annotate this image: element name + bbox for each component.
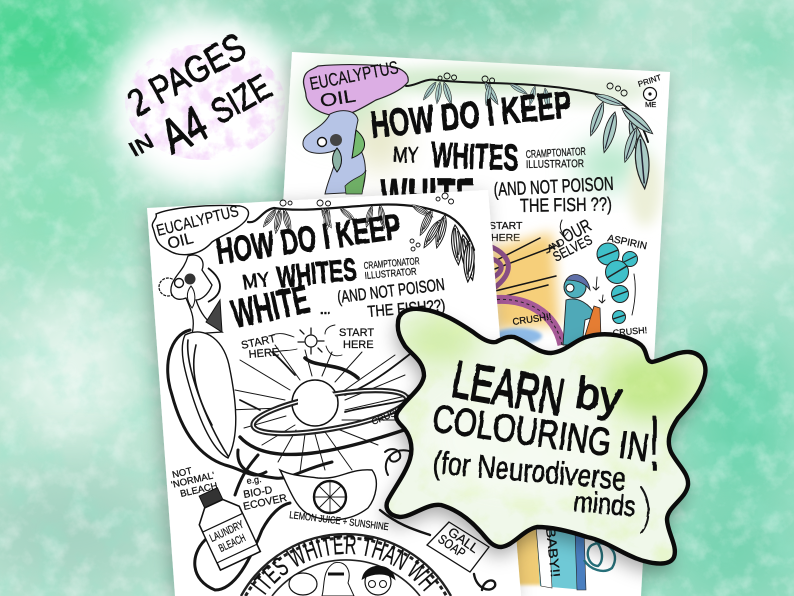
front brand note: e.g. (246, 474, 262, 486)
back author credit: ILLUSTRATOR (526, 158, 584, 171)
shell (289, 573, 317, 595)
back eucalyptus branch (406, 73, 656, 189)
front bottle: laundry bleach: LAUNDRY (208, 519, 246, 545)
front start-here notes with small sun: START (339, 327, 374, 339)
front crush label and curl: CRUSH!! (370, 404, 408, 427)
front start-here notes with small sun: HERE (343, 339, 374, 351)
front koala on trunk (159, 255, 222, 334)
back aspirin pills: ASPIRIN (606, 233, 648, 252)
front brand note (242, 474, 288, 513)
front tube looping to lemon (195, 450, 332, 590)
callout headline: minds (572, 486, 637, 523)
front author credit: CRAMPTONATOR (363, 256, 420, 272)
back title: MY (393, 142, 420, 167)
back and-ourselves note (542, 215, 595, 265)
back start-here note: HERE (491, 232, 520, 244)
callout headline: ! (649, 400, 660, 488)
white cloud with pink splatter behind size note (110, 17, 300, 193)
callout headline: LEARN (448, 351, 568, 427)
callout headline (430, 351, 660, 533)
front not-normal-bleach note (170, 466, 219, 500)
front start-here notes with small sun (240, 325, 374, 361)
front gall soap tag: SOAP (435, 531, 468, 561)
person in hood with sunglasses (322, 562, 354, 596)
back author credit (526, 146, 586, 171)
front title: WHITES (275, 252, 358, 295)
front brand note: BIO-D (242, 484, 274, 501)
back koala (303, 111, 366, 194)
callout headline: by (573, 368, 625, 423)
front start-here notes with small sun: START (240, 333, 277, 352)
front title: HOW DO I KEEP (213, 205, 403, 272)
back and-ourselves note: OUR (559, 215, 595, 247)
back label: Eucalyptus Oil: OIL (318, 86, 357, 111)
back author credit: CRAMPTONATOR (526, 146, 586, 161)
front author credit (363, 256, 420, 282)
front not-normal-bleach note: 'NORMAL' (170, 470, 216, 491)
back start-here note (489, 220, 523, 244)
back figure with pestle (563, 275, 601, 345)
front title: ... (320, 302, 331, 317)
back subtitle: THE FISH ??) (520, 194, 612, 217)
back aspirin pills (593, 233, 648, 338)
front label: Eucalyptus Oil (152, 203, 248, 255)
back and-ourselves note: SELVES (550, 231, 595, 265)
note: 2 pages in A4 size: 2 PAGES (121, 26, 253, 125)
note: 2 pages in A4 size: A4 (152, 95, 216, 165)
back label: Eucalyptus Oil (303, 57, 408, 116)
front title: WHITE (228, 278, 313, 337)
front bottle: laundry bleach (188, 483, 260, 570)
back print-me stamp: PRINT (637, 73, 663, 89)
front label: Eucalyptus Oil: EUCALYPTUS (155, 203, 240, 240)
front long leaf on left (168, 330, 266, 475)
note: 2 pages in A4 size (121, 26, 278, 165)
front not-normal-bleach note: BLEACH (179, 481, 219, 500)
front big sun with rays (228, 345, 420, 472)
callout: wavy lime blob (380, 300, 710, 570)
back sheet colour washes (300, 62, 661, 226)
back print-me stamp: ME (645, 100, 656, 109)
back print-me stamp (637, 73, 663, 109)
front not-normal-bleach note: NOT (171, 466, 193, 481)
front title (213, 205, 403, 337)
front subtitle: THE FISH??) (367, 297, 446, 321)
back aspirin pills: CRUSH! (612, 325, 648, 338)
back lower coloured band with baby text (510, 525, 615, 590)
note: 2 pages in A4 size: SIZE (204, 67, 278, 132)
front subtitle: (AND NOT POISON (336, 275, 446, 307)
back and-ourselves note: ...AND (542, 237, 567, 257)
front lemon with slice (280, 470, 376, 520)
back coloured sun rays (488, 232, 562, 345)
back start-here note: START (489, 220, 523, 232)
back title (369, 84, 574, 228)
front bottle: laundry bleach: BLEACH (217, 532, 248, 555)
front subtitle (336, 275, 446, 321)
back lower coloured band with baby text: BABY!! (543, 527, 563, 578)
back subtitle: (AND NOT POISON (493, 174, 614, 201)
back title: WHITE (380, 168, 475, 228)
front label: Eucalyptus Oil: OIL (166, 230, 195, 253)
back title: HOW DO I KEEP (369, 84, 574, 147)
front gall soap tag (380, 510, 495, 590)
front lemon juice caption: LEMON JUICE + SUNSHINE (289, 510, 389, 533)
person with dark hair (363, 567, 394, 595)
back subtitle (493, 174, 614, 217)
back title: WHITES (431, 134, 519, 178)
front start-here notes with small sun: HERE (248, 346, 280, 361)
front brand note: ECOVER (242, 492, 288, 513)
front sheet: black and white page (136, 186, 526, 596)
front crush label and curl (370, 404, 412, 475)
front title: MY (241, 269, 271, 294)
note: 2 pages in A4 size: IN (126, 130, 157, 161)
back sheet: coloured page (260, 52, 670, 596)
front eucalyptus branch (248, 193, 478, 282)
back label: Eucalyptus Oil: EUCALYPTUS (308, 57, 400, 94)
back crush label: CRUSH!! (512, 312, 552, 328)
front author credit: ILLUSTRATOR (364, 266, 417, 282)
front gall soap tag: GALL (445, 524, 482, 556)
callout headline: COLOURING IN (430, 397, 652, 470)
callout headline: (for Neurodiverse (431, 444, 628, 497)
